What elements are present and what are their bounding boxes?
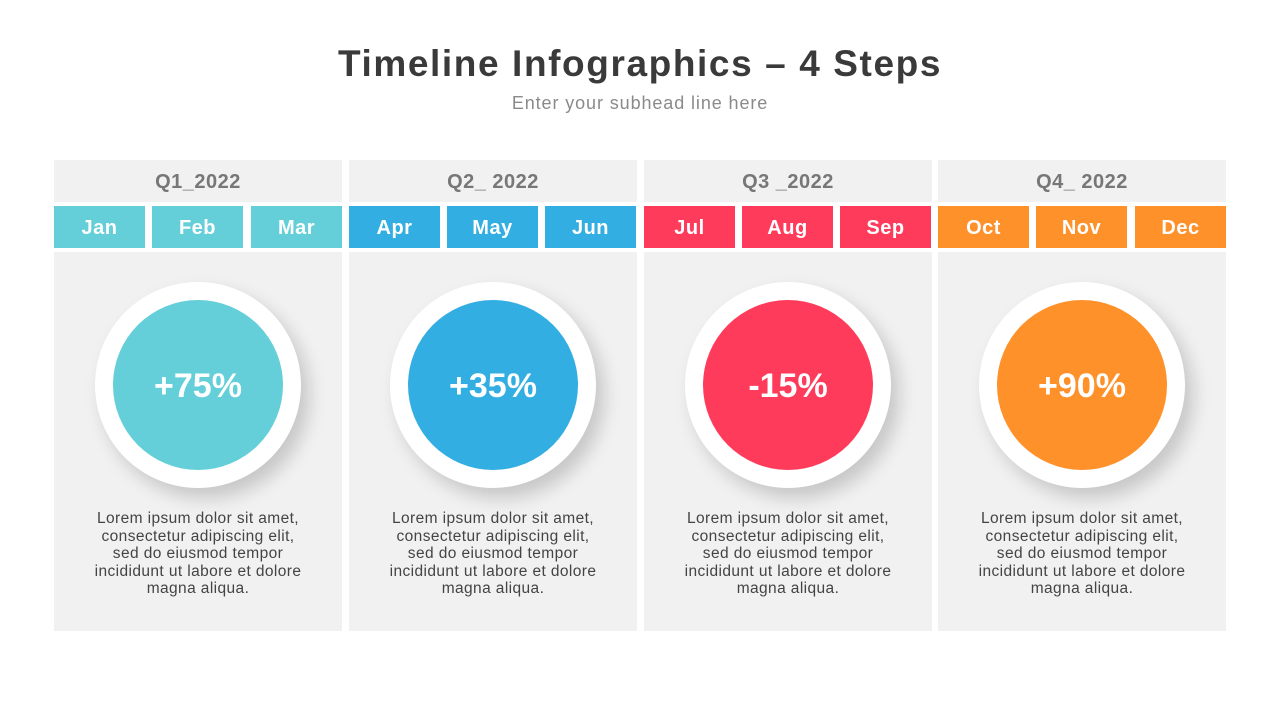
month: Mar [251, 206, 342, 248]
text block: Lorem ipsum dolor sit amet, [981, 510, 1183, 527]
month: Apr [349, 206, 440, 248]
header: Q2 [349, 160, 637, 202]
circle: +75%: +75% [154, 367, 242, 405]
header: Q4: Q4_ 2022 [1036, 171, 1128, 193]
panel: Q2 [349, 160, 637, 631]
text block: magna aliqua. [442, 580, 544, 597]
text block: incididunt ut labore et dolore [979, 562, 1185, 580]
header: Q1: Q1_2022 [155, 171, 241, 193]
text block: Lorem ipsum dolor sit amet, [687, 510, 889, 527]
month: Nov: Nov [1062, 217, 1101, 239]
header: Q4 [938, 160, 1226, 202]
circle: -15% [685, 282, 891, 488]
text block: incididunt ut labore et dolore [390, 562, 596, 580]
month: Sep: Sep [866, 217, 905, 239]
text block: consectetur adipiscing elit, [102, 528, 294, 544]
text block: sed do eiusmod tempor [408, 545, 578, 562]
panel: Q1 [54, 160, 342, 631]
body: Q1 [54, 252, 342, 631]
circle: +75% [95, 282, 301, 488]
text block: consectetur adipiscing elit, [986, 528, 1178, 544]
month: Mar: Mar [278, 217, 315, 239]
month: Feb: Feb [179, 217, 216, 239]
header: Q3 [644, 160, 932, 202]
circle: +35%: +35% [449, 367, 537, 405]
text block: magna aliqua. [737, 580, 839, 597]
month: Jun [545, 206, 636, 248]
circle: +90%: +90% [1038, 367, 1126, 405]
text block: consectetur adipiscing elit, [396, 528, 590, 544]
header: Q3: Q3 _2022 [742, 171, 834, 193]
text block: Lorem ipsum dolor sit amet, [392, 510, 594, 527]
month: Apr: Apr [377, 217, 412, 239]
header: Q2: Q2_ 2022 [447, 171, 539, 193]
text block: incididunt ut labore et dolore [685, 562, 891, 580]
panel: Q3 [644, 160, 932, 631]
month: Nov [1036, 206, 1127, 248]
month: Oct: Oct [966, 217, 1001, 239]
text block: magna aliqua. [1031, 580, 1133, 597]
text block [95, 510, 301, 597]
text block: sed do eiusmod tempor [703, 545, 873, 562]
header: Q1 [54, 160, 342, 202]
title: Timeline Infographics – 4 Steps [338, 43, 942, 84]
month: Jan [54, 206, 145, 248]
text block: incididunt ut labore et dolore [95, 562, 301, 580]
text block: sed do eiusmod tempor [113, 545, 283, 562]
month: Aug [742, 206, 833, 248]
month: Feb [152, 206, 243, 248]
text block: consectetur adipiscing elit, [692, 528, 884, 544]
body: Q3 [644, 252, 932, 631]
text block: magna aliqua. [147, 580, 249, 597]
month: May [447, 206, 538, 248]
month: May: May [472, 217, 513, 239]
text block: sed do eiusmod tempor [997, 545, 1167, 562]
text block [685, 510, 891, 597]
circle: +35% [390, 282, 596, 488]
circle: -15%: -15% [748, 367, 828, 405]
subhead: Enter your subhead line here [512, 93, 768, 113]
month: Dec: Dec [1161, 217, 1200, 239]
body: Q4 [938, 252, 1226, 631]
month: Sep [840, 206, 931, 248]
circle: +90% [979, 282, 1185, 488]
month: Oct [938, 206, 1029, 248]
month: Jun: Jun [572, 217, 609, 239]
month: Dec [1135, 206, 1226, 248]
panel: Q4 [938, 160, 1226, 631]
month: Jul [644, 206, 735, 248]
month: Jan: Jan [82, 217, 117, 239]
text block [390, 510, 596, 597]
month: Aug: Aug [767, 217, 808, 239]
body: Q2 [349, 252, 637, 631]
month: Jul: Jul [674, 217, 705, 239]
text block [979, 510, 1185, 597]
text block: Lorem ipsum dolor sit amet, [97, 510, 299, 527]
